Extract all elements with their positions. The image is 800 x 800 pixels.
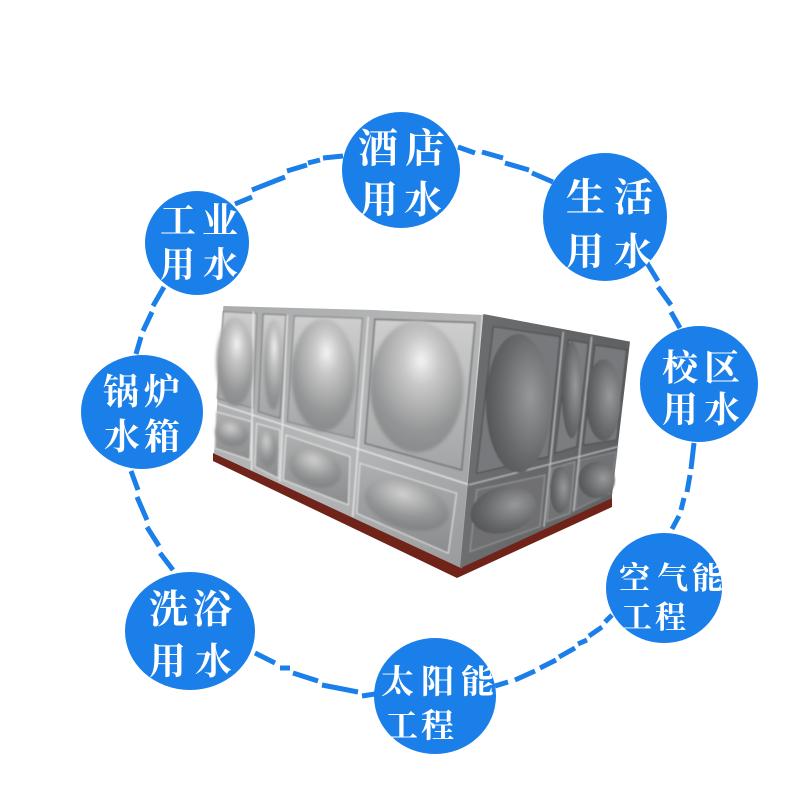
circle: industrial water: 用水	[160, 246, 238, 285]
circle: hotel water: 用水	[360, 180, 442, 222]
circle: solar project: 工程	[385, 708, 454, 745]
circle: domestic water	[543, 153, 667, 281]
circle: hotel water	[342, 112, 460, 228]
circle: industrial water	[145, 191, 249, 295]
circle: air energy project: 工程	[621, 600, 686, 635]
circle: campus water	[640, 326, 758, 442]
circle: air energy project: 空气能	[619, 561, 723, 596]
circle: hotel water: 酒店	[358, 126, 445, 171]
circle: domestic water: 生活	[566, 177, 653, 220]
circle: boiler tank	[81, 355, 203, 469]
circle: industrial water: 工业	[160, 201, 238, 241]
circle: campus water: 校区	[662, 348, 740, 388]
circle: solar project: 太阳能	[381, 664, 494, 701]
circle: boiler tank: 水箱	[104, 417, 180, 457]
circle: bathing water: 用水	[149, 641, 232, 683]
tank right side face	[460, 314, 630, 568]
circle: bathing water	[125, 572, 255, 690]
dashed ring connecting the circles	[131, 147, 694, 696]
circle: bathing water: 洗浴	[149, 589, 234, 632]
circle: campus water: 用水	[662, 390, 740, 430]
circle: domestic water: 用水	[566, 232, 652, 274]
circle: air energy project	[606, 533, 723, 643]
circle: boiler tank: 锅炉	[103, 372, 180, 412]
red tank base	[213, 453, 612, 578]
stainless steel water tank photo illustration	[212, 306, 630, 578]
tank front face	[212, 306, 484, 568]
circle: solar project	[374, 638, 496, 754]
